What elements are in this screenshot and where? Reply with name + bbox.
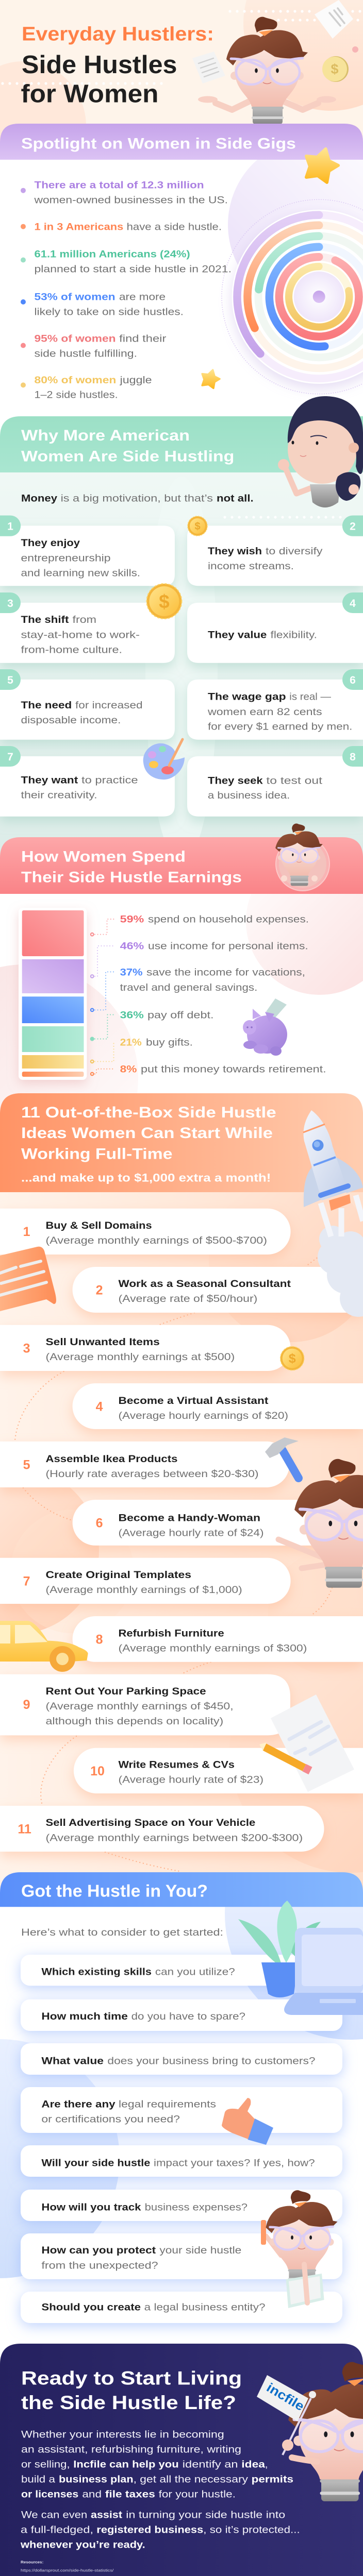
text block: first paragraph: idea: [241, 2459, 265, 2470]
card 1: They enjoy: [21, 537, 80, 549]
panel: call to action: [0, 2344, 363, 2576]
pill 3: [0, 1325, 291, 1371]
text block: second paragraph: registered business: [96, 2524, 203, 2536]
text block: second paragraph: We can even: [21, 2510, 87, 2521]
text block: money intro: [21, 493, 254, 504]
illustration: dark-haired woman: [278, 396, 363, 507]
icon: pink dot: [352, 46, 358, 53]
pill 6: Become a Handy-Woman: [119, 1512, 260, 1523]
stat: 61.1 million: 61.1 million Americans (24%): [34, 248, 190, 260]
card 8: 8: [350, 751, 356, 763]
title: [21, 24, 214, 108]
text block: second paragraph: whenever you’re ready.: [20, 2539, 145, 2551]
title: Side Hustles: [22, 51, 177, 79]
text block: resources: Resources:: [21, 2560, 43, 2565]
stat list: spending: [120, 913, 326, 1075]
card 7: to practice: [81, 774, 138, 786]
card 5: [0, 669, 175, 740]
icon: small coin: [188, 516, 207, 536]
question: legal: legal requirements: [119, 2099, 216, 2110]
pill 5: [0, 1442, 289, 1487]
pill 3: 3: [23, 1341, 30, 1355]
pill 11: 11: [18, 1822, 31, 1836]
stat: gifts: buy gifts.: [146, 1037, 193, 1048]
card 6: The wage gap: [208, 691, 286, 703]
question: protect: How can you protect: [41, 2245, 156, 2256]
pill 10: (Average hourly rate of $23): [119, 1774, 263, 1786]
chart: concentric rings: [222, 199, 363, 394]
stat: personal items: 46%: [120, 941, 144, 952]
pill 10: Write Resumes & CVs: [119, 1759, 235, 1770]
question: legal: or certifications you need?: [41, 2114, 180, 2125]
card 3: stay-at-home to work-: [21, 629, 140, 640]
pill 6: (Average hourly rate of $24): [119, 1527, 264, 1538]
heading: side hustle ideas: Working Full-Time: [21, 1145, 172, 1162]
illustration: rocket and smoke: [303, 1110, 363, 1317]
question: expenses: [21, 2190, 342, 2221]
stat: 80 percent: juggle: [119, 375, 152, 386]
heading: side hustle ideas: ...and make up to $1,000 extra a month!: [21, 1171, 271, 1184]
illustration: woman peeking from porthole: [275, 823, 329, 891]
pill 2: Work as a Seasonal Consultant: [119, 1278, 291, 1290]
icon: large star: [306, 149, 338, 182]
stat: women-owned businesses: [21, 180, 228, 206]
text block: second paragraph: in turning your side hustle into: [126, 2510, 285, 2521]
card 2: income streams.: [208, 561, 294, 572]
pill 9: although this depends on locality): [45, 1716, 223, 1727]
text block: first paragraph: or licenses: [21, 2489, 78, 2500]
stat: 61.1 million: planned to start a side hustle in 2021.: [34, 264, 232, 275]
pill 7: [0, 1558, 291, 1604]
card 5: 5: [7, 674, 13, 686]
text block: resources: [21, 2560, 310, 2576]
icon: coin: $: [289, 1351, 296, 1366]
heading: spending: How Women Spend: [21, 848, 186, 866]
pill 5: (Hourly rate averages between $20-$30): [45, 1468, 259, 1480]
icon: thumbs up: [222, 2098, 273, 2145]
text block: resources: https://dollarsprout.com/side-hustle-statistics/: [21, 2568, 114, 2573]
icon: pale coin: $: [331, 61, 339, 77]
text block: first paragraph: build a: [21, 2474, 55, 2485]
stat: retirement: 8%: [120, 1063, 137, 1075]
stat: one in three: 1 in 3 Americans: [34, 222, 123, 233]
heading: side hustle ideas: 11 Out-of-the-Box Side Hustle: [21, 1104, 276, 1121]
heading: side hustle ideas: Ideas Women Can Start While: [21, 1125, 273, 1142]
pill 11: (Average monthly earnings between $200-$300): [45, 1832, 303, 1843]
card 4: [187, 592, 363, 663]
pill 9: Rent Out Your Parking Space: [45, 1686, 206, 1697]
panel: side hustle ideas body: [0, 1133, 363, 1896]
pill 3: Sell Unwanted Items: [45, 1336, 160, 1348]
text block: money intro: is a big motivation, but that’s: [61, 493, 213, 504]
heading: got the hustle: Got the Hustle in You?: [21, 1881, 208, 1900]
card 3: [0, 592, 175, 663]
heading: ready: Ready to Start Living: [21, 2367, 242, 2388]
stat: personal items: use income for personal items.: [148, 941, 308, 952]
panel: why women hustle body: [0, 443, 363, 863]
question: protect: your side hustle: [159, 2245, 241, 2256]
icon: small coin: $: [194, 521, 201, 532]
question: taxes: impact your taxes? If yes, how?: [154, 2157, 315, 2168]
pill 1: [0, 1209, 291, 1255]
card 6: women earn 82 cents: [207, 706, 322, 718]
card 8: to test out: [266, 775, 323, 786]
stat: 53 percent: [21, 292, 184, 317]
pill 5: 5: [23, 1458, 30, 1472]
text block: second paragraph: a full-fledged,: [21, 2524, 93, 2536]
icon: yellow car: [0, 1621, 88, 1672]
question: protect: [21, 2233, 342, 2279]
heading: spotlight: [0, 124, 363, 160]
text block: intro: Here’s what to consider to get started:: [21, 1927, 223, 1938]
heading: ready: the Side Hustle Life?: [21, 2392, 236, 2413]
title: for Women: [21, 80, 159, 108]
pill 7: (Average monthly earnings of $1,000): [45, 1584, 242, 1596]
question: time: do you have to spare?: [131, 2011, 245, 2022]
text block: first paragraph: for your hustle.: [159, 2489, 236, 2500]
decorative dots: hero: [1, 10, 361, 85]
card 3: from: [72, 614, 96, 625]
card 8: [187, 746, 363, 817]
heading: got the hustle: [0, 1872, 363, 1907]
text block: first paragraph: Whether your interests lie in becoming: [21, 2429, 224, 2441]
icon: hammer: [265, 1437, 299, 1478]
decorative dotted paths: [15, 1256, 332, 1871]
panel: spotlight body: [0, 138, 363, 443]
question: value: does your business bring to customers?: [107, 2055, 316, 2066]
card 6: is real —: [289, 691, 332, 703]
card 5: disposable income.: [21, 715, 121, 726]
pill 11: Sell Advertising Space on Your Vehicle: [45, 1817, 255, 1828]
text block: first paragraph: and: [82, 2489, 102, 2500]
stat: one in three: [21, 222, 222, 233]
heading: why women: Why More American: [21, 427, 190, 444]
illustration: woman with phone and clipboard: [261, 2190, 338, 2308]
heading: ready: [21, 2367, 242, 2413]
text block: first paragraph: or selling,: [21, 2459, 70, 2470]
question: time: [21, 1999, 342, 2031]
card 3: from-home culture.: [21, 644, 122, 655]
pill 7: 7: [23, 1574, 30, 1588]
pill 4: 4: [96, 1400, 103, 1414]
question: entity: Should you create: [41, 2301, 141, 2313]
card 1: [0, 515, 175, 586]
question: expenses: business expenses?: [145, 2202, 248, 2213]
stat: 95 percent: find their: [119, 333, 167, 345]
card 7: 7: [7, 751, 13, 763]
pill 1: 1: [23, 1225, 30, 1239]
stat: savings: save the income for vacations,: [146, 967, 305, 978]
question: taxes: [21, 2145, 342, 2177]
illustration: woman lightbulb character: [198, 17, 336, 124]
card 7: their creativity.: [21, 789, 97, 801]
pill 4: [73, 1383, 363, 1429]
card 8: They seek: [208, 775, 263, 786]
card 1: and learning new skills.: [21, 567, 140, 579]
stat: retirement: put this money towards retirement.: [141, 1063, 326, 1075]
stat: 80 percent: [21, 375, 152, 401]
icon: chat bubble: [0, 1247, 56, 1311]
question: time: How much time: [41, 2011, 128, 2022]
text block: second paragraph: [20, 2510, 300, 2551]
heading: side hustle ideas: [0, 1093, 363, 1192]
illustration: plant and laptop: [238, 1901, 363, 2015]
stat: savings: 37%: [120, 967, 143, 978]
card 8: a business idea.: [208, 790, 290, 801]
text block: first paragraph: file taxes: [105, 2489, 155, 2500]
card 3: The shift: [21, 614, 69, 625]
text block: money intro: not all.: [217, 493, 254, 504]
question: entity: [21, 2292, 342, 2323]
icon: folded paper: [315, 0, 353, 39]
question: legal: [21, 2087, 342, 2133]
question: value: [21, 2043, 342, 2075]
question: taxes: Will your side hustle: [41, 2157, 151, 2168]
text block: second paragraph: , so it’s protected...: [203, 2524, 300, 2536]
title: Everyday Hustlers:: [22, 24, 214, 45]
pill 5: Assemble Ikea Products: [45, 1453, 178, 1465]
connectors: bar to labels: [91, 919, 116, 1075]
stat: debt: 36%: [120, 1010, 144, 1021]
stat: debt: [120, 1010, 213, 1021]
text block: first paragraph: business plan: [59, 2474, 134, 2485]
stat: 95 percent: 95% of women: [34, 333, 116, 345]
question: existing skills: can you utilize?: [155, 1966, 235, 1977]
stat: 80 percent: 1–2 side hustles.: [34, 389, 118, 401]
stat: 95 percent: [21, 333, 167, 359]
icon: piggy bank: [243, 998, 287, 1056]
pill 2: 2: [96, 1283, 103, 1298]
pill 9: 9: [23, 1698, 30, 1712]
text block: first paragraph: Incfile can help you: [73, 2459, 179, 2470]
heading: why women: Women Are Side Hustling: [21, 448, 234, 465]
card 2: 2: [350, 520, 356, 533]
stat list: side gig facts: [21, 180, 232, 401]
panel: spending body: [0, 848, 363, 1191]
icon: paper scroll: [192, 52, 225, 83]
text block: first paragraph: [21, 2429, 293, 2500]
stat: 53 percent: are more: [119, 292, 166, 303]
icon: small star: [202, 370, 220, 388]
pill 4: Become a Virtual Assistant: [119, 1395, 269, 1406]
pill 10: [74, 1748, 363, 1793]
stat: savings: travel and general savings.: [120, 982, 257, 993]
heading: spending: [0, 837, 363, 894]
card 5: for increased: [75, 700, 143, 711]
illustration: woman holding incfile flag: incfile: [264, 2380, 307, 2414]
pill 9: [0, 1674, 290, 1735]
card 6: 6: [350, 674, 356, 686]
stat: household: spend on household expenses.: [148, 913, 309, 925]
heading: spending: Their Side Hustle Earnings: [21, 869, 242, 886]
stat: gifts: [120, 1037, 193, 1048]
text block: first paragraph: identify an: [183, 2459, 238, 2470]
card 4: 4: [350, 598, 356, 609]
question cards: [21, 1955, 342, 2323]
pill 2: [73, 1267, 363, 1313]
chart: stacked bar: [19, 908, 87, 1080]
question: existing skills: Which existing skills: [41, 1966, 152, 1977]
card 7: [0, 746, 175, 817]
icon: coin: [280, 1347, 304, 1370]
text block: first paragraph: an assistant, refurbishing furniture, writing: [21, 2444, 241, 2455]
stat: 53 percent: likely to take on side hustles.: [34, 306, 184, 317]
text block: money intro: Money: [21, 493, 57, 504]
illustration: woman with open hands: [278, 1459, 363, 1588]
card 4: They value: [208, 629, 267, 640]
icon: pale coin: [322, 56, 349, 82]
heading: spotlight: Spotlight on Women in Side Gigs: [21, 135, 296, 152]
card 6: [187, 669, 363, 740]
stat: debt: pay off debt.: [147, 1010, 213, 1021]
stat: 61.1 million: [21, 248, 232, 275]
pill 8: 8: [96, 1633, 103, 1647]
pill 3: (Average monthly earnings at $500): [45, 1351, 235, 1363]
pill 7: Create Original Templates: [45, 1569, 191, 1581]
stat: women-owned businesses: women-owned businesses in the US.: [34, 194, 228, 206]
pill 6: 6: [96, 1516, 103, 1531]
card 3: 3: [7, 598, 13, 609]
text block: first paragraph: ,: [265, 2459, 268, 2470]
card 2: They wish: [208, 546, 262, 557]
heading: why women: [0, 416, 363, 472]
pill 11: [0, 1806, 324, 1852]
pill 10: 10: [90, 1764, 105, 1778]
panel: got the hustle body: [0, 1907, 363, 2278]
pill 8: Refurbish Furniture: [119, 1628, 224, 1639]
question: expenses: How will you track: [41, 2202, 141, 2213]
pill 4: (Average hourly earnings of $20): [119, 1410, 288, 1421]
stat: gifts: 21%: [120, 1037, 142, 1048]
stat: household: 59%: [120, 913, 144, 925]
question: entity: a legal business entity?: [144, 2301, 266, 2313]
icon: large coin: [146, 584, 182, 619]
icon: paint palette: [143, 739, 185, 779]
pill 8: (Average monthly earnings of $300): [119, 1642, 307, 1654]
stat: women-owned businesses: There are a total of 12.3 million: [34, 180, 204, 191]
panel: hero background: [0, 0, 363, 191]
card 2: [187, 515, 363, 586]
question: value: What value: [41, 2055, 104, 2066]
card 5: The need: [21, 700, 72, 711]
question: existing skills: [21, 1955, 342, 1986]
stat: 95 percent: side hustle fulfilling.: [34, 348, 137, 359]
pill 2: (Average rate of $50/hour): [119, 1293, 257, 1304]
pill 1: Buy & Sell Domains: [45, 1220, 152, 1231]
question: legal: Are there any: [41, 2099, 116, 2110]
stat: savings: [120, 967, 305, 993]
pill 9: (Average monthly earnings of $450,: [45, 1701, 234, 1712]
icon: paper and pencil: [259, 1694, 354, 1792]
question: protect: from the unexpected?: [41, 2260, 158, 2271]
stat: 53 percent: 53% of women: [34, 292, 116, 303]
card 6: for every $1 earned by men.: [208, 721, 352, 732]
text block: first paragraph: , get all the necessary: [134, 2474, 248, 2485]
card 2: to diversify: [266, 546, 323, 557]
card 1: entrepreneurship: [21, 552, 111, 564]
stat: 80 percent: 80% of women: [34, 375, 116, 386]
text block: second paragraph: assist: [91, 2510, 123, 2521]
illustration: woman holding incfile flag: [257, 2362, 363, 2501]
text block: first paragraph: permits: [252, 2474, 293, 2485]
icon: large coin: $: [159, 591, 170, 612]
pill 6: [73, 1500, 363, 1546]
card 1: 1: [7, 520, 13, 533]
pill 8: [73, 1616, 363, 1662]
decorative dots: why women: [223, 516, 342, 519]
card 4: flexibility.: [270, 629, 317, 640]
pill 1: (Average monthly earnings of $500-$700): [45, 1235, 267, 1246]
card 7: They want: [21, 774, 78, 786]
stat: one in three: have a side hustle.: [127, 222, 222, 233]
